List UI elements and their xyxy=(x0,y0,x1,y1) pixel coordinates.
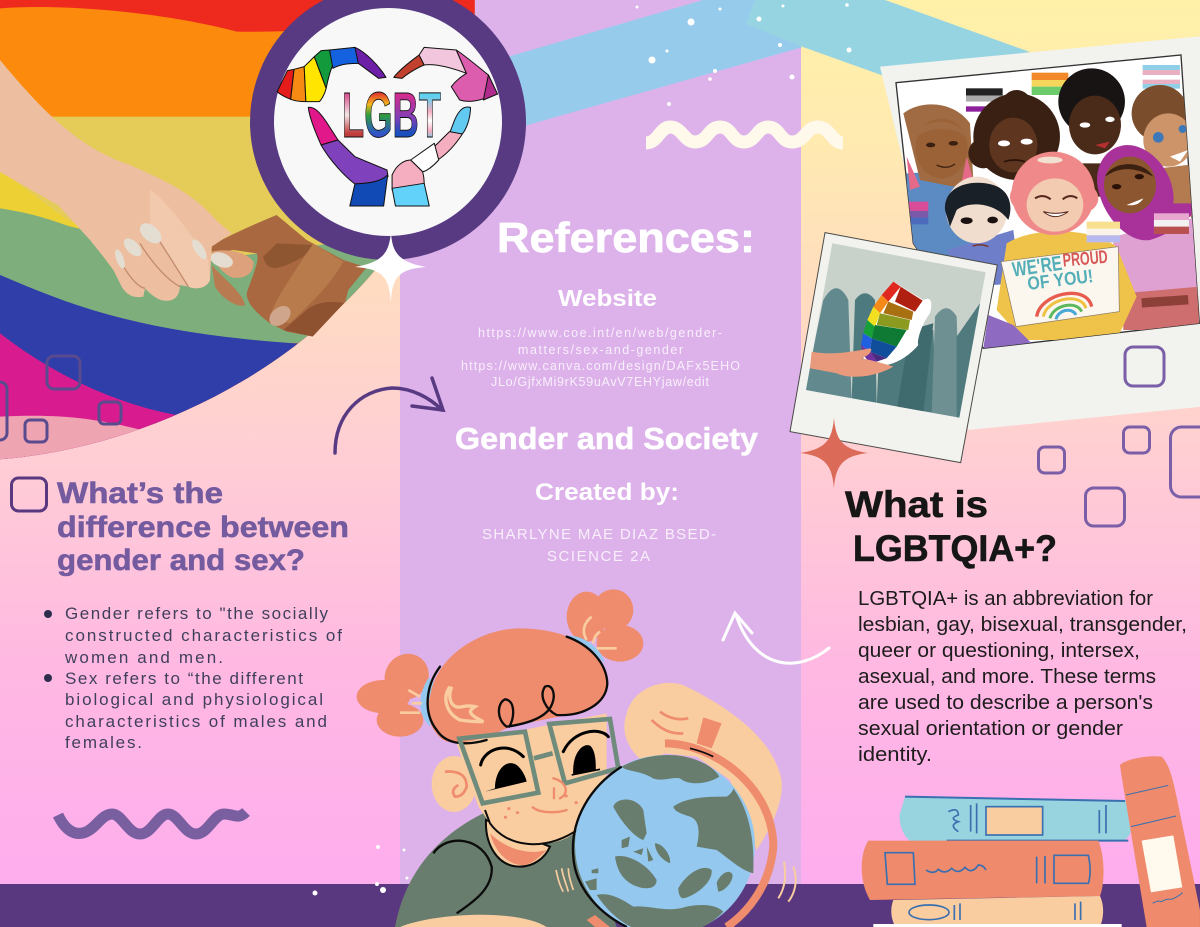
logo: LGBT hands in a ring xyxy=(262,0,514,248)
ear xyxy=(432,756,476,812)
page background: left panel xyxy=(0,0,400,927)
text block: LGBTQIA+ definition: queer or questioning, intersex, xyxy=(858,639,1140,662)
neck xyxy=(486,820,550,867)
hair tufts xyxy=(357,589,643,737)
author: SCIENCE 2A xyxy=(547,548,650,565)
text block: LGBTQIA+ definition: LGBTQIA+ is an abbreviation for xyxy=(858,587,1153,610)
globe stand xyxy=(587,717,773,927)
reference URLs: https://www.canva.com/design/DAFx5EHO xyxy=(461,359,740,373)
reference URLs: https://www.coe.int/en/web/gender- xyxy=(478,326,722,340)
text block: LGBTQIA+ definition: lesbian, gay, bisexual, transgender, xyxy=(858,613,1187,636)
right person xyxy=(1132,85,1192,217)
subheading: website: Website xyxy=(558,285,657,311)
arrow: white curve xyxy=(723,613,829,663)
polaroid frame xyxy=(880,37,1200,430)
hand xyxy=(810,348,893,377)
curly-haired person xyxy=(968,90,1060,180)
wave: purple xyxy=(58,812,246,834)
text block: gender and sex definitions: biological and physiological xyxy=(65,690,323,709)
author: SHARLYNE MAE DIAZ BSED- xyxy=(482,526,716,543)
reference URLs: JLo/GjfxMi9rK59uAvV7EHYjaw/edit xyxy=(491,375,710,389)
wave: cream xyxy=(646,127,843,143)
dark-skinned person xyxy=(1058,68,1125,197)
book: leaning orange xyxy=(1120,756,1200,927)
panel: pride flag photo xyxy=(0,0,485,467)
text block: gender and sex definitions: constructed characteristics of xyxy=(65,626,342,645)
hair xyxy=(428,628,607,743)
illustration: stack of books xyxy=(862,756,1200,927)
illustration: group photo polaroid xyxy=(880,37,1200,430)
left person xyxy=(903,104,974,256)
pink-haired person holding sign xyxy=(997,152,1137,340)
reference URLs xyxy=(461,326,740,389)
author xyxy=(482,526,716,565)
heading: gender and society: Gender and Society xyxy=(455,421,759,456)
hand: transgender xyxy=(392,107,470,206)
sign: we're proud of you: OF YOU! xyxy=(1026,265,1094,294)
heading: what is LGBTQIA+: What is xyxy=(845,484,988,525)
book: blue xyxy=(900,797,1131,842)
photo with silhouettes xyxy=(806,244,986,418)
page background: right panel xyxy=(801,0,1200,927)
text block: gender and sex definitions: Gender refers to "the socially xyxy=(65,604,328,623)
heading: difference between gender and sex: difference between xyxy=(57,511,349,544)
hand: rainbow xyxy=(277,47,386,102)
flag bands xyxy=(0,0,485,467)
decorative squares on the flag xyxy=(0,356,121,442)
text block: gender and sex definitions: females. xyxy=(65,733,142,752)
text block: gender and sex definitions: characteristics of males and xyxy=(65,712,327,731)
hand artwork xyxy=(277,47,498,206)
arrow: purple curve xyxy=(335,378,443,453)
text block: LGBTQIA+ definition: identity. xyxy=(858,743,932,766)
flags xyxy=(966,65,1180,112)
text block: gender and sex definitions: women and men. xyxy=(64,648,223,667)
heading: difference between gender and sex: What’s the xyxy=(57,477,223,510)
illustration: small polaroid with flag xyxy=(790,233,1003,463)
small polaroid frame xyxy=(790,233,997,463)
rainbow flag in hand xyxy=(861,282,931,366)
nose, mouth and freckles xyxy=(505,778,576,817)
motion lines xyxy=(778,862,796,902)
reference URLs: matters/sex-and-gender xyxy=(518,343,683,357)
purple jacket xyxy=(983,315,1033,348)
book: orange xyxy=(862,841,1104,900)
heading: difference between gender and sex: gender and sex? xyxy=(57,544,305,577)
text block: gender and sex definitions: Sex refers to “the different xyxy=(65,669,303,688)
hand: lesbian xyxy=(394,47,498,101)
white speckles xyxy=(312,3,852,895)
text block: LGBTQIA+ definition: sexual orientation or gender xyxy=(858,717,1123,740)
bi flag xyxy=(908,202,928,224)
arm over globe xyxy=(624,683,782,850)
text block: gender and sex definitions xyxy=(44,604,342,752)
hair ties xyxy=(420,636,605,727)
sign: we're proud of you xyxy=(1001,246,1119,327)
page background: centre panel xyxy=(400,0,801,927)
hijab person xyxy=(1097,145,1200,330)
body xyxy=(395,813,617,927)
left heading checkbox xyxy=(12,478,46,511)
sign: we're proud of you: PROUD xyxy=(1062,246,1108,271)
heading: references: References: xyxy=(497,214,755,261)
dark-haired person xyxy=(945,177,1020,287)
illustration: girl with globe xyxy=(357,589,796,927)
logo ring xyxy=(262,0,514,248)
text block: LGBTQIA+ definition xyxy=(858,587,1187,766)
logo lettering: LGBT xyxy=(342,79,441,151)
shoulder xyxy=(433,841,492,913)
dark hand xyxy=(208,215,367,337)
white strip xyxy=(873,924,1122,927)
decorative squares right xyxy=(1038,347,1200,526)
eyes and brows xyxy=(481,731,608,792)
hand: bisexual xyxy=(308,107,388,206)
blue diagonal ribbon xyxy=(490,0,1030,130)
sign: we're proud of you: WE'RE xyxy=(1011,252,1064,282)
heading: difference between gender and sex xyxy=(57,477,349,577)
light hand and arm xyxy=(0,60,232,301)
heading: what is LGBTQIA+ xyxy=(845,484,1057,569)
globe xyxy=(573,755,755,927)
face xyxy=(457,713,607,844)
hair outline and curls xyxy=(428,637,607,743)
glasses xyxy=(459,719,618,803)
group portrait xyxy=(896,55,1200,348)
book: peach xyxy=(891,896,1103,926)
holding hands photo xyxy=(0,60,367,337)
sparkle star: coral xyxy=(800,418,868,488)
text block: LGBTQIA+ definition: are used to describe a person's xyxy=(858,691,1153,714)
white sparkle star xyxy=(355,232,426,303)
back arm xyxy=(400,915,547,927)
subheading: created by: Created by: xyxy=(535,479,679,506)
purple bottom band xyxy=(0,884,1200,927)
text block: LGBTQIA+ definition: asexual, and more. These terms xyxy=(858,665,1156,688)
heading: what is LGBTQIA+: LGBTQIA+? xyxy=(853,528,1057,569)
